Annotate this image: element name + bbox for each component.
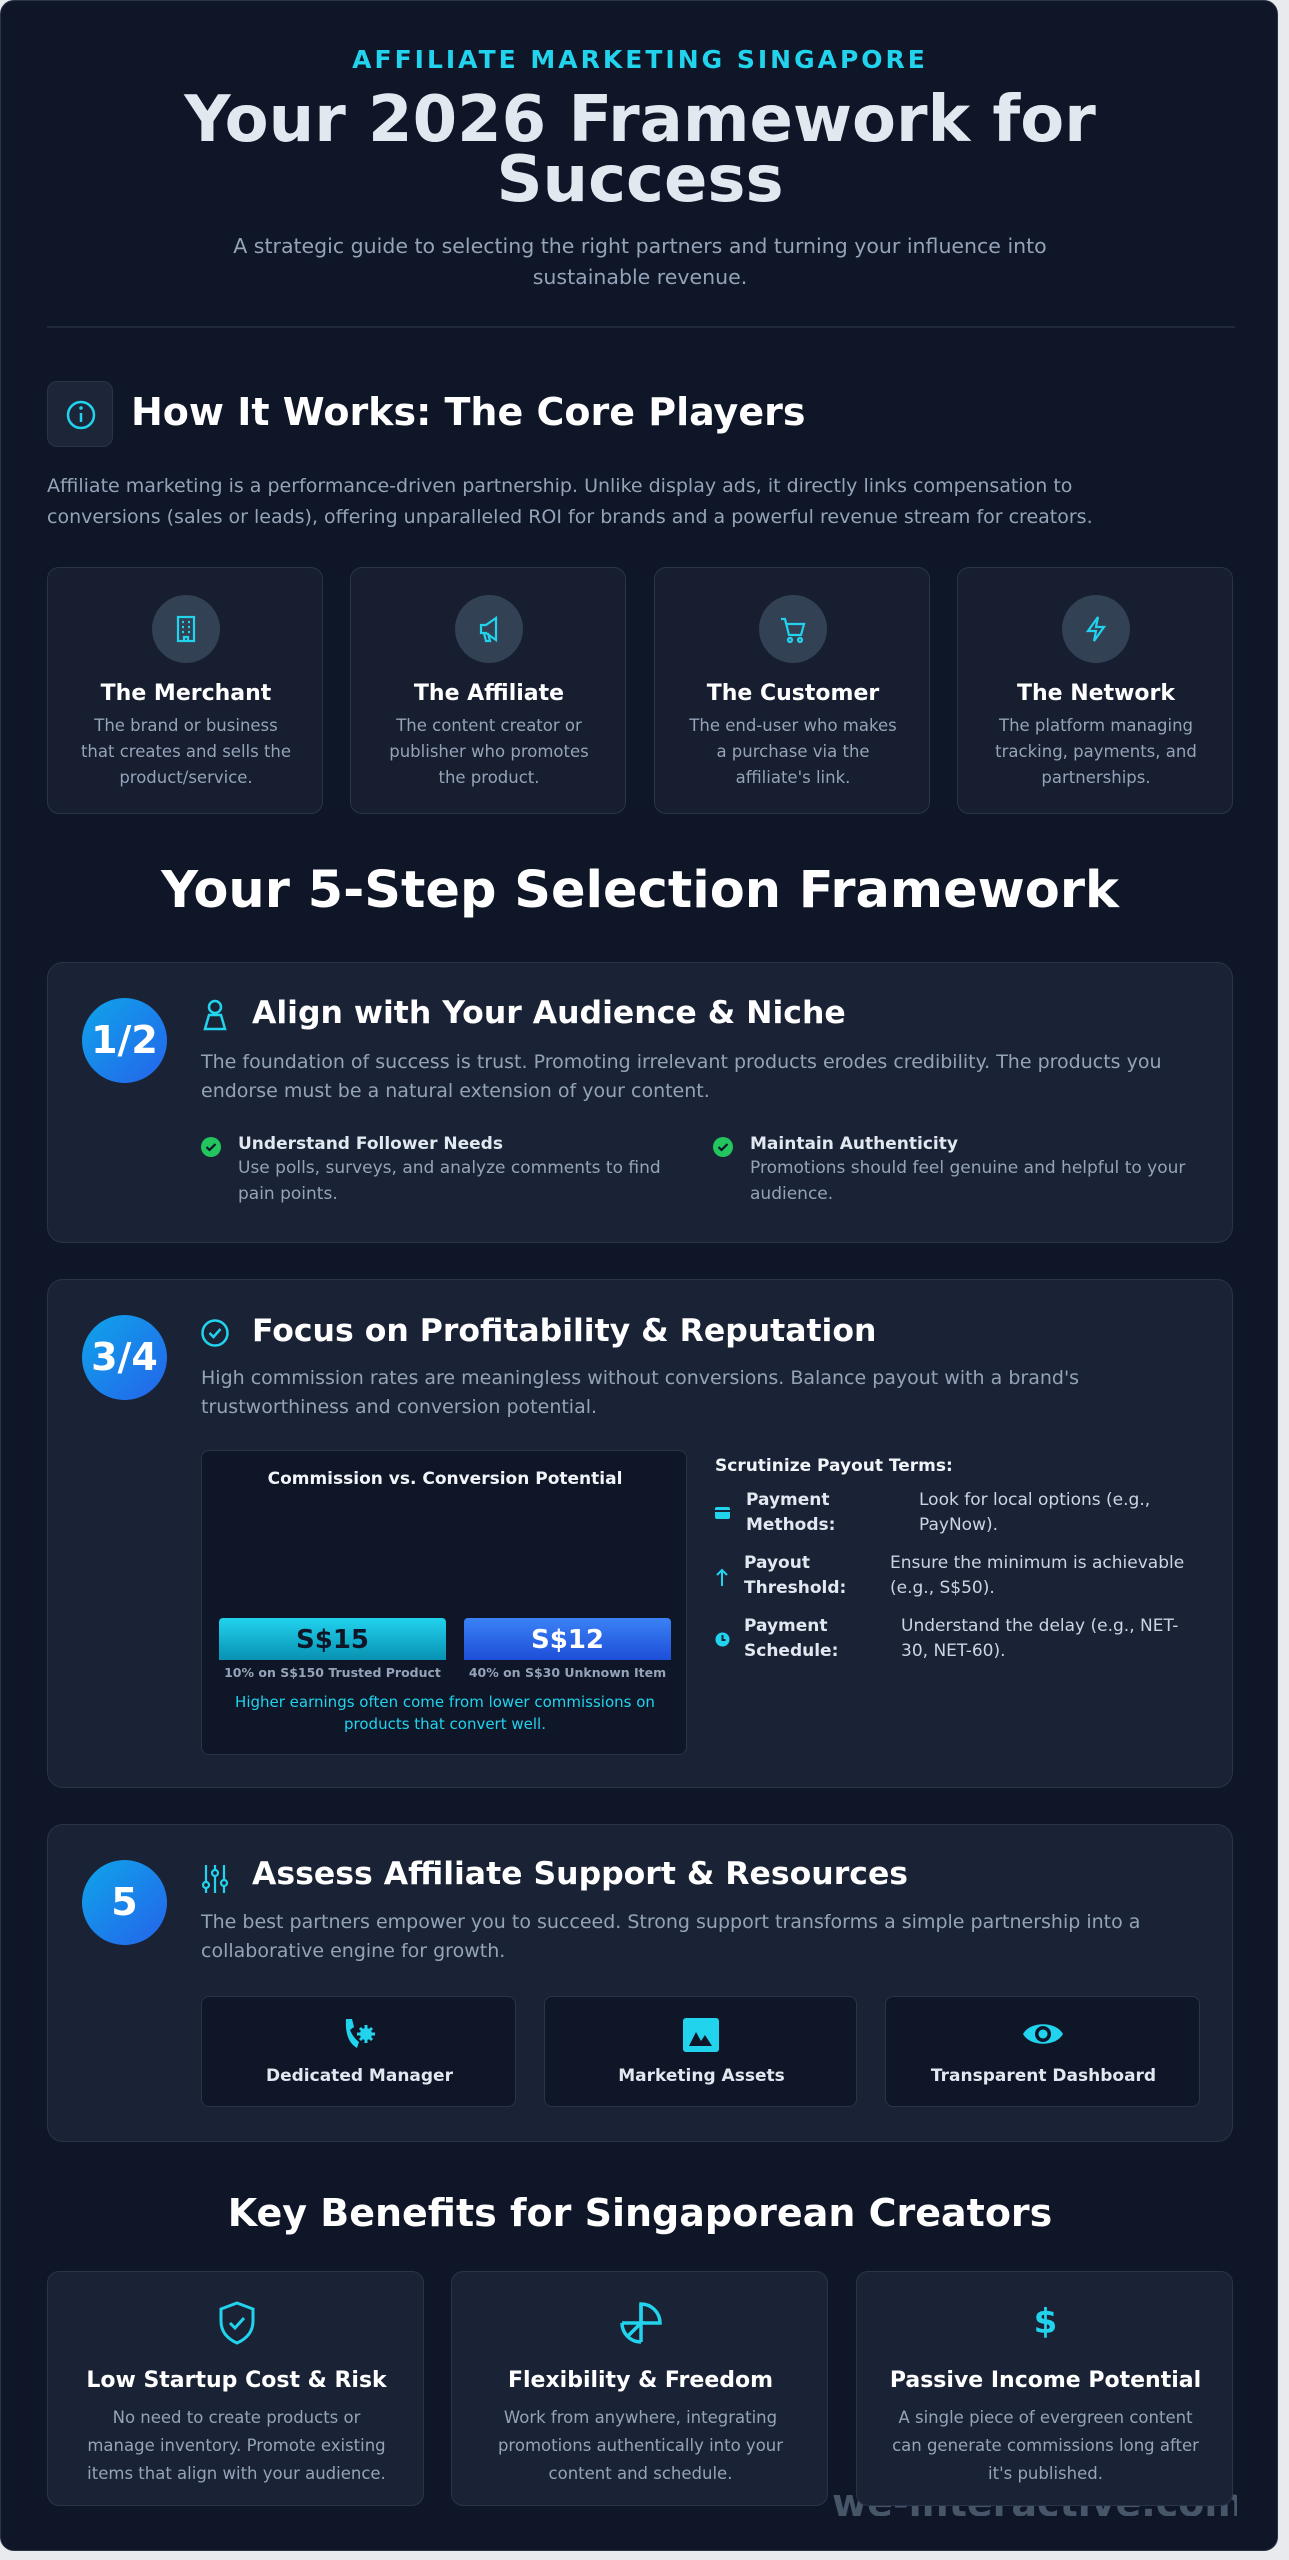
player card: customer: affiliate's link.: [736, 768, 850, 787]
player card: network: The Network: [1017, 681, 1175, 706]
benefit card: low startup: Low Startup Cost & Risk: [86, 2368, 387, 2393]
checklist item 2: [713, 1134, 1186, 1204]
checklist item 1: [201, 1134, 661, 1204]
subtitle: A strategic guide to selecting the right partners and turning your influence into: [233, 234, 1047, 258]
term: payout threshold: Payout: [744, 1553, 810, 1573]
payout terms list: [715, 1456, 1184, 1661]
benefit card: flexibility: Work from anywhere, integrating: [504, 2408, 777, 2427]
term: payout threshold: [716, 1553, 1184, 1598]
icon: lightning: [1062, 595, 1130, 663]
benefit card: passive income: it's published.: [988, 2464, 1103, 2483]
benefit card: flexibility: content and schedule.: [549, 2464, 732, 2483]
intro paragraph: conversions (sales or leads), offering unparalleled ROI for brands and a powerful revenue stream for creators.: [47, 506, 1093, 528]
step text: endorse must be a natural extension of your content.: [201, 1080, 710, 1102]
title: Success: [496, 143, 784, 217]
subtitle: sustainable revenue.: [533, 265, 747, 289]
benefit card: flexibility: Flexibility & Freedom: [508, 2368, 773, 2393]
player card: affiliate: the product.: [438, 768, 540, 787]
bar: S$12: [464, 1618, 671, 1660]
player card: merchant: [47, 567, 323, 814]
checklist item 2: Maintain Authenticity: [750, 1134, 958, 1154]
intro paragraph: [47, 475, 1093, 528]
subtitle: [233, 234, 1047, 289]
section heading: key benefits: Key Benefits for Singaporean Creators: [228, 2191, 1052, 2235]
chart panel: [201, 1450, 687, 1755]
player card: affiliate: [350, 567, 626, 814]
benefit card: passive income: A single piece of evergreen content: [898, 2408, 1193, 2427]
section heading: how it works: [47, 381, 805, 447]
support box: dashboard: Transparent Dashboard: [931, 2066, 1156, 2086]
player card: affiliate: The Affiliate: [414, 681, 564, 706]
benefit card: flexibility: promotions authentically into your: [498, 2436, 783, 2455]
icon: phone gear: [346, 2019, 375, 2048]
support box: manager: [201, 1996, 516, 2107]
section heading: framework: Your 5-Step Selection Framework: [161, 861, 1119, 920]
bar: S$12: S$12: [531, 1625, 604, 1655]
term: payment schedule: Schedule:: [744, 1641, 838, 1661]
step badge: 3/4: [91, 1335, 158, 1379]
player card: customer: [654, 567, 930, 814]
bar label 1: 10% on S$150 Trusted Product: [224, 1665, 441, 1680]
eyebrow label: AFFILIATE MARKETING SINGAPORE: [352, 45, 928, 74]
benefit card: low startup: manage inventory. Promote existing: [87, 2436, 386, 2455]
player card: affiliate: publisher who promotes: [389, 742, 589, 761]
player card: customer: The end-user who makes: [689, 716, 897, 735]
icon: pie: [620, 2302, 662, 2344]
benefit card: passive income: Passive Income Potential: [890, 2368, 1201, 2393]
bar: S$15: S$15: [296, 1625, 369, 1655]
step heading: Align with Your Audience & Niche: [252, 995, 846, 1031]
benefit card: low startup: items that align with your audience.: [87, 2464, 386, 2483]
step text: [200, 1051, 1162, 1102]
chart note: Higher earnings often come from lower commissions on: [235, 1693, 655, 1711]
term: payment schedule: [716, 1616, 1178, 1661]
checklist item 1: Understand Follower Needs: [238, 1134, 503, 1154]
bar label 2: 40% on S$30 Unknown Item: [469, 1665, 666, 1680]
step text: collaborative engine for growth.: [201, 1940, 505, 1962]
step heading: Focus on Profitability & Reputation: [252, 1313, 876, 1349]
term: payout threshold: Threshold:: [744, 1578, 846, 1598]
term: payout threshold: (e.g., S$50).: [890, 1578, 995, 1598]
step badge: 1/2: [91, 1018, 158, 1062]
icon: building: [152, 595, 220, 663]
title: [184, 83, 1096, 217]
chart note: products that convert well.: [344, 1715, 546, 1733]
step badge: [82, 1860, 167, 1945]
term: payment methods: [715, 1490, 1150, 1535]
step text: The best partners empower you to succeed. Strong support transforms a simple partnership into a: [201, 1911, 1140, 1933]
step text: trustworthiness and conversion potential.: [201, 1396, 597, 1418]
icon: user: [203, 1000, 227, 1030]
payout terms list: Scrutinize Payout Terms:: [715, 1456, 953, 1476]
term: payment schedule: 30, NET-60).: [901, 1641, 1006, 1661]
player card: network: The platform managing: [999, 716, 1193, 735]
player card: customer: a purchase via the: [716, 742, 870, 761]
chart title: Commission vs. Conversion Potential: [268, 1469, 622, 1489]
step text: The foundation of success is trust. Promoting irrelevant products erodes credibility. The products you: [201, 1051, 1162, 1073]
section heading: how it works: How It Works: The Core Players: [131, 390, 805, 434]
player card: merchant: that creates and sells the: [81, 742, 291, 761]
benefit card: low startup: No need to create products or: [113, 2408, 360, 2427]
icon: check circle: [201, 1319, 229, 1347]
step heading: Assess Affiliate Support & Resources: [252, 1856, 908, 1892]
support box: dashboard: [885, 1996, 1200, 2107]
icon: shield: [220, 2301, 254, 2345]
player card: network: [957, 567, 1233, 814]
player card: merchant: The Merchant: [101, 681, 271, 706]
term: payment methods: Methods:: [746, 1515, 835, 1535]
icon: info: [47, 381, 113, 447]
benefit card: passive income: can generate commissions long after: [892, 2436, 1199, 2455]
title: Your 2026 Framework for: [184, 83, 1096, 157]
term: payment methods: Look for local options (e.g.,: [919, 1490, 1150, 1510]
checklist item 2: Promotions should feel genuine and helpful to your: [750, 1158, 1185, 1178]
benefit card: flexibility: [451, 2271, 828, 2506]
step text: [200, 1911, 1140, 1962]
term: payout threshold: Ensure the minimum is achievable: [890, 1553, 1184, 1573]
support box: assets: Marketing Assets: [618, 2066, 785, 2086]
checklist item 1: Use polls, surveys, and analyze comments to find: [238, 1158, 661, 1178]
checklist item 1: pain points.: [238, 1184, 338, 1204]
term: payment methods: Payment: [746, 1490, 830, 1510]
term: payment schedule: Payment: [744, 1616, 828, 1636]
player card: network: tracking, payments, and: [995, 742, 1197, 761]
icon: cart: [759, 595, 827, 663]
icon: megaphone: [455, 595, 523, 663]
chart note: [235, 1693, 655, 1733]
player card: customer: The Customer: [707, 681, 879, 706]
player card: affiliate: The content creator or: [396, 716, 582, 735]
term: payment schedule: Understand the delay (e.g., NET-: [901, 1616, 1178, 1636]
bar: S$15: [219, 1618, 446, 1660]
benefit card: passive income: [856, 2271, 1233, 2506]
player card: merchant: The brand or business: [94, 716, 278, 735]
step card 1/2: [47, 962, 1233, 1243]
step badge: 5: [111, 1880, 138, 1924]
icon: eye: [1023, 2024, 1063, 2044]
intro paragraph: Affiliate marketing is a performance-driven partnership. Unlike display ads, it directly links compensation to: [47, 475, 1072, 497]
benefit card: low startup: [47, 2271, 424, 2506]
icon: sliders: [202, 1865, 228, 1893]
step text: High commission rates are meaningless without conversions. Balance payout with a brand's: [201, 1367, 1079, 1389]
step badge: [82, 998, 167, 1083]
step badge: [82, 1315, 167, 1400]
player card: network: partnerships.: [1041, 768, 1151, 787]
player card: merchant: product/service.: [119, 768, 253, 787]
step text: [201, 1367, 1079, 1418]
support box: assets: [544, 1996, 857, 2107]
icon: dollar: $: [1034, 2302, 1057, 2342]
step card 3/4: [47, 1279, 1233, 1788]
term: payment methods: PayNow).: [919, 1515, 998, 1535]
step card 5: [47, 1824, 1233, 2142]
icon: image: [683, 2018, 719, 2052]
checklist item 2: audience.: [750, 1184, 833, 1204]
support box: manager: Dedicated Manager: [266, 2066, 453, 2086]
